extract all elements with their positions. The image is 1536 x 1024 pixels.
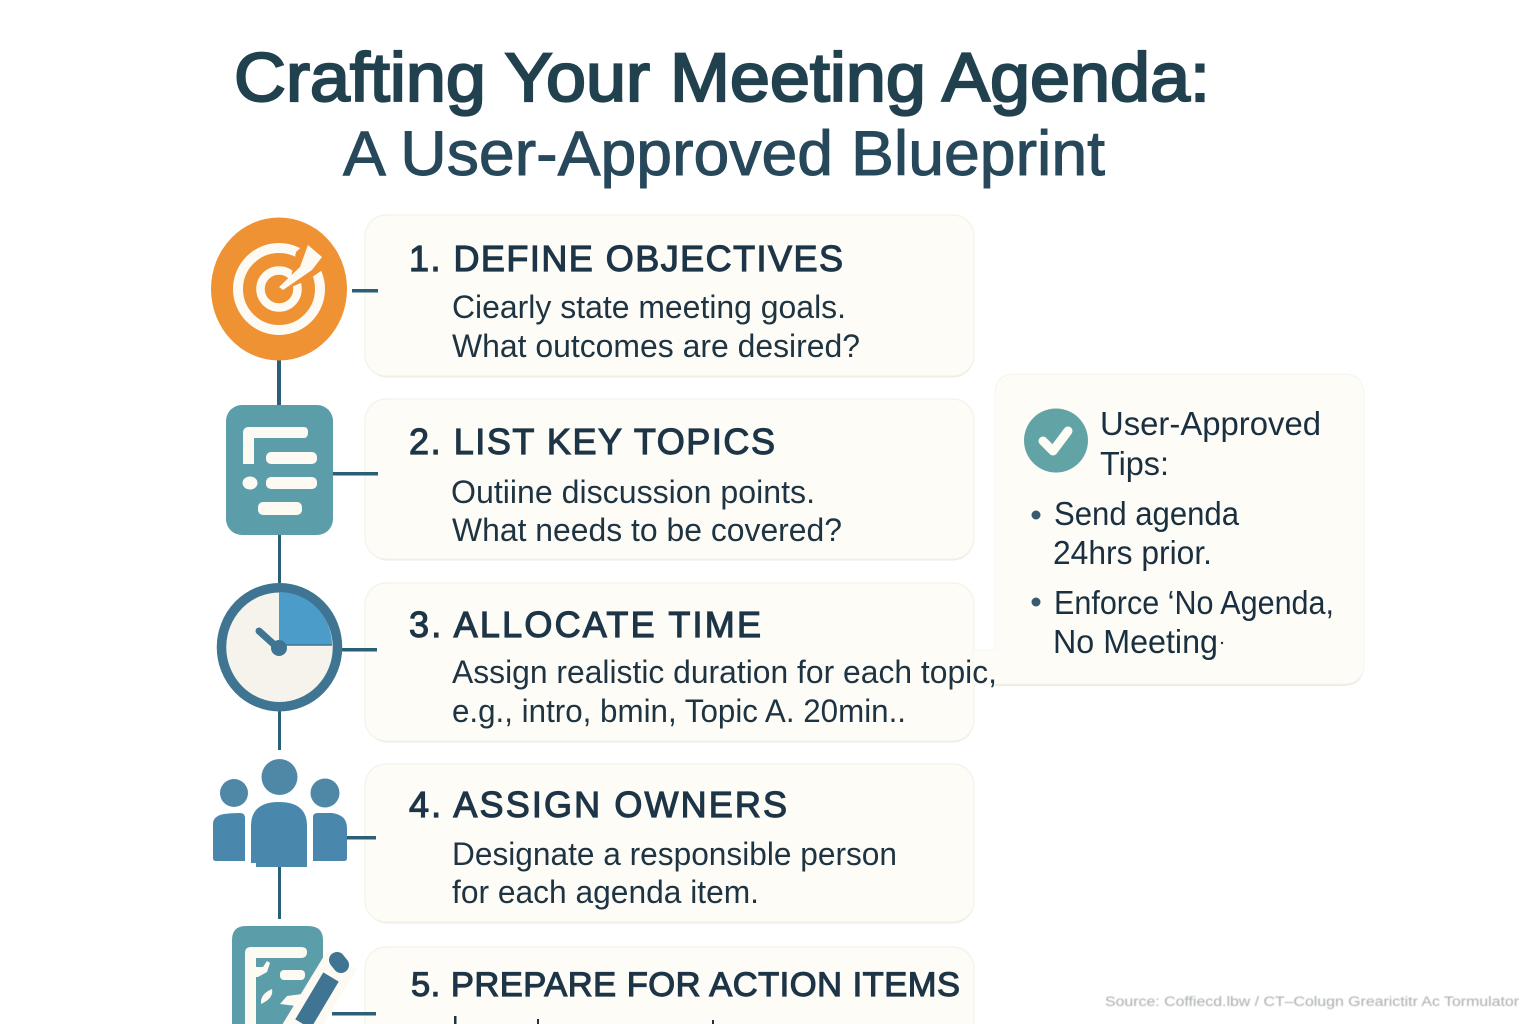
text: assign owners body: Designate a responsible person (452, 836, 897, 872)
heading: tips (1100, 405, 1321, 482)
panel: 2 list key topics (365, 399, 974, 560)
text: define objectives body (452, 289, 860, 364)
tip: no agenda no meeting: Enforce ‘No Agenda, (1054, 584, 1334, 621)
text: define objectives body: Ciearly state meeting goals. (452, 289, 846, 325)
icon: clock (222, 588, 338, 707)
tip: send agenda: 24hrs prior. (1053, 534, 1212, 571)
heading: list key topics: 2. LIST KEY TOPICS (409, 421, 775, 462)
title: Crafting Your Meeting Agenda: (234, 39, 1210, 116)
title (234, 39, 1210, 189)
text: list key topics body (451, 474, 842, 548)
heading: prepare for action items: 5. PREPARE FOR ACTION ITEMS (411, 966, 960, 1004)
clipped body text tops (454, 1016, 714, 1024)
icon: checklist with pencil (232, 926, 342, 1024)
panel: 1 define objectives (365, 215, 974, 378)
panel: 3 allocate time (365, 583, 974, 742)
text: list key topics body: Outiine discussion points. (451, 474, 815, 510)
heading: assign owners: 4. ASSIGN OWNERS (409, 784, 787, 825)
panel: 4 assign owners (365, 764, 974, 924)
icon: target (211, 218, 347, 360)
text: assign owners body: for each agenda item. (452, 874, 759, 910)
text: allocate time body: e.g., intro, bmin, Topic A. 20min.. (452, 693, 906, 729)
title: A User-Approved Blueprint (343, 119, 1105, 189)
source note: Source: Coffiecd.lbw / CT–Colugn Grearictitr Ac Tormulator (1105, 994, 1520, 1009)
heading: allocate time: 3. ALLOCATE TIME (409, 604, 761, 645)
text: define objectives body: What outcomes are desired? (452, 328, 860, 364)
heading: tips: Tips: (1100, 445, 1169, 482)
timeline connectors (277, 289, 378, 1016)
heading: define objectives: 1. DEFINE OBJECTIVES (409, 238, 843, 279)
icon: check badge (1024, 408, 1088, 472)
heading: tips: User-Approved (1100, 405, 1321, 442)
text: allocate time body (452, 654, 997, 729)
icon: document list (226, 405, 333, 535)
panel: 5 prepare for action items (365, 947, 974, 1024)
text: assign owners body (452, 836, 897, 910)
text: list key topics body: What needs to be covered? (452, 512, 842, 548)
text: allocate time body: Assign realistic duration for each topic, (452, 654, 997, 690)
tip: no agenda no meeting: No Meeting (1053, 623, 1218, 660)
panel: user-approved tips (973, 374, 1364, 686)
icon: team of people (213, 759, 347, 867)
tip: send agenda: Send agenda (1054, 495, 1240, 532)
tip: send agenda (1032, 495, 1240, 571)
tip: no agenda no meeting (1032, 584, 1334, 660)
